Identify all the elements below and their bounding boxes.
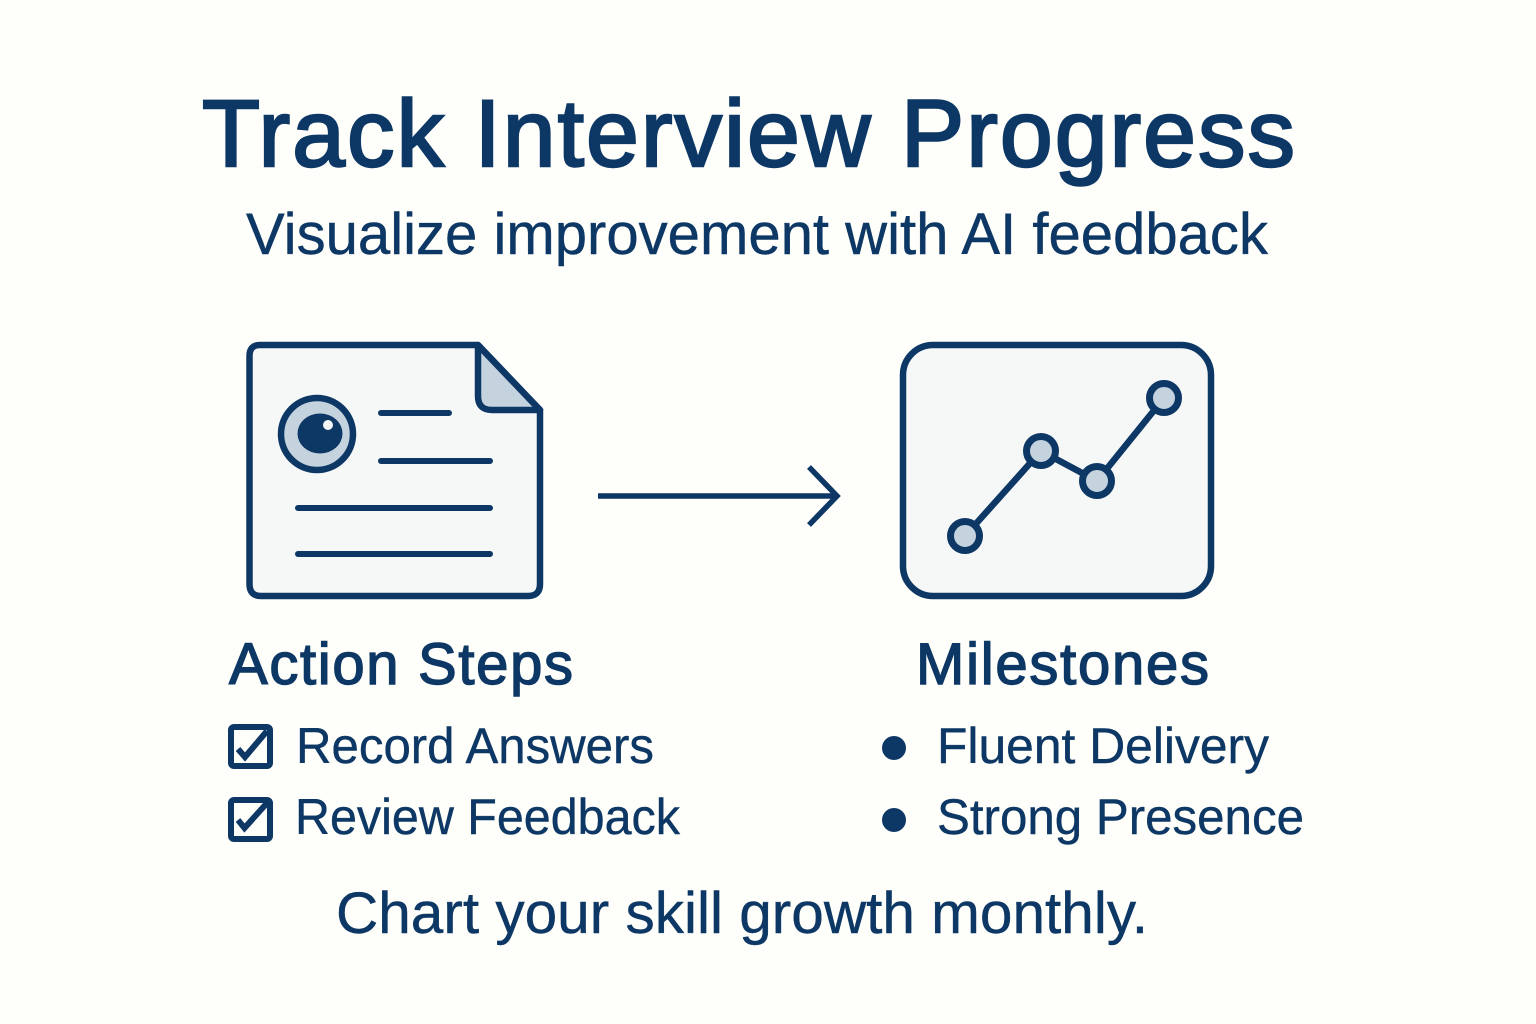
icon: checkbox 1	[231, 727, 270, 766]
footer caption: Chart your skill growth monthly.	[336, 881, 1148, 946]
bullet 2	[882, 808, 906, 832]
milestone 2: Strong Presence	[937, 789, 1304, 845]
icon: resume document with eye	[250, 345, 540, 596]
subtitle: Visualize improvement with AI feedback	[246, 202, 1269, 267]
heading: milestones: Milestones	[916, 632, 1209, 697]
document fold	[478, 345, 540, 410]
heading: action steps: Action Steps	[229, 632, 573, 697]
title: Track Interview Progress	[202, 81, 1295, 187]
arrow	[598, 467, 837, 525]
icon: checkbox 2	[231, 800, 270, 839]
eye	[281, 398, 353, 470]
document text lines	[298, 413, 490, 554]
action step 2: Review Feedback	[295, 789, 681, 845]
icon: progress line chart	[903, 345, 1211, 596]
action step 1: Record Answers	[296, 718, 654, 774]
bullet 1	[882, 736, 906, 760]
milestone 1: Fluent Delivery	[937, 718, 1269, 774]
